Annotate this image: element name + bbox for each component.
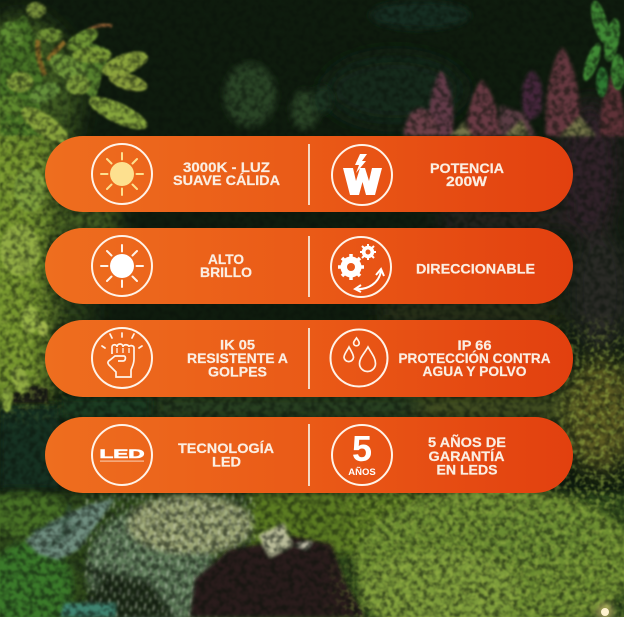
background: bright leaves top right [580, 0, 624, 97]
panel: row 1 [45, 136, 573, 212]
text: 5 anos de garantia en LEDs: EN LEDS [436, 462, 498, 478]
text: 3000K luz suave calida: SUAVE CÁLIDA [173, 173, 280, 188]
text: 3000K luz suave calida: 3000K - LUZ [183, 160, 270, 175]
text: 5 anos de garantia en LEDs: 5 AÑOS DE [428, 435, 506, 450]
text: alto brillo: ALTO [208, 252, 244, 267]
icon: gears and arrow [331, 237, 391, 297]
background: hanging leaves left [0, 168, 48, 413]
icon: warm sun [92, 144, 152, 204]
text: IK 05 resistente a golpes: RESISTENTE A [187, 351, 288, 366]
text: potencia 200W: POTENCIA [430, 161, 504, 176]
panel: row 4 [45, 417, 573, 493]
icon: LED [92, 425, 152, 485]
icon: fist [92, 328, 152, 388]
panel: row 2 [45, 228, 573, 304]
icon: 5 years: AÑOS [348, 467, 376, 478]
background: bottom foreground plants [0, 488, 624, 617]
text: IP 66 proteccion contra agua y polvo: IP 66 [458, 338, 492, 353]
panel: row 3 [45, 320, 573, 397]
background: garden lamp glow [596, 603, 614, 617]
background: large soft colour masses [0, 15, 624, 470]
background: purple plumes [404, 47, 624, 136]
text: direccionable: DIRECCIONABLE [416, 262, 535, 276]
icon: bright sun [92, 236, 152, 296]
text: potencia 200W: 200W [446, 174, 487, 189]
icon: 5 years [332, 425, 392, 485]
text: IP 66 proteccion contra agua y polvo: PROTECCIÓN CONTRA [398, 351, 551, 366]
background: lawn [0, 405, 60, 488]
text: IK 05 resistente a golpes: IK 05 [220, 338, 256, 352]
text: tecnologia LED: LED [212, 454, 241, 470]
text: IP 66 proteccion contra agua y polvo: AGUA Y POLVO [422, 364, 526, 379]
icon: 5 years: 5 [352, 428, 372, 469]
text: 5 anos de garantia en LEDs: GARANTÍA [428, 449, 505, 464]
text: IK 05 resistente a golpes: GOLPES [208, 364, 267, 380]
text: alto brillo: BRILLO [200, 265, 252, 280]
icon: power W [332, 145, 392, 205]
icon: LED: LED [100, 447, 145, 461]
background: compound leaves top left [0, 2, 151, 149]
icon: water drops [330, 330, 388, 386]
text: tecnologia LED: TECNOLOGÍA [178, 441, 274, 456]
background: shrubs top [224, 1, 470, 130]
